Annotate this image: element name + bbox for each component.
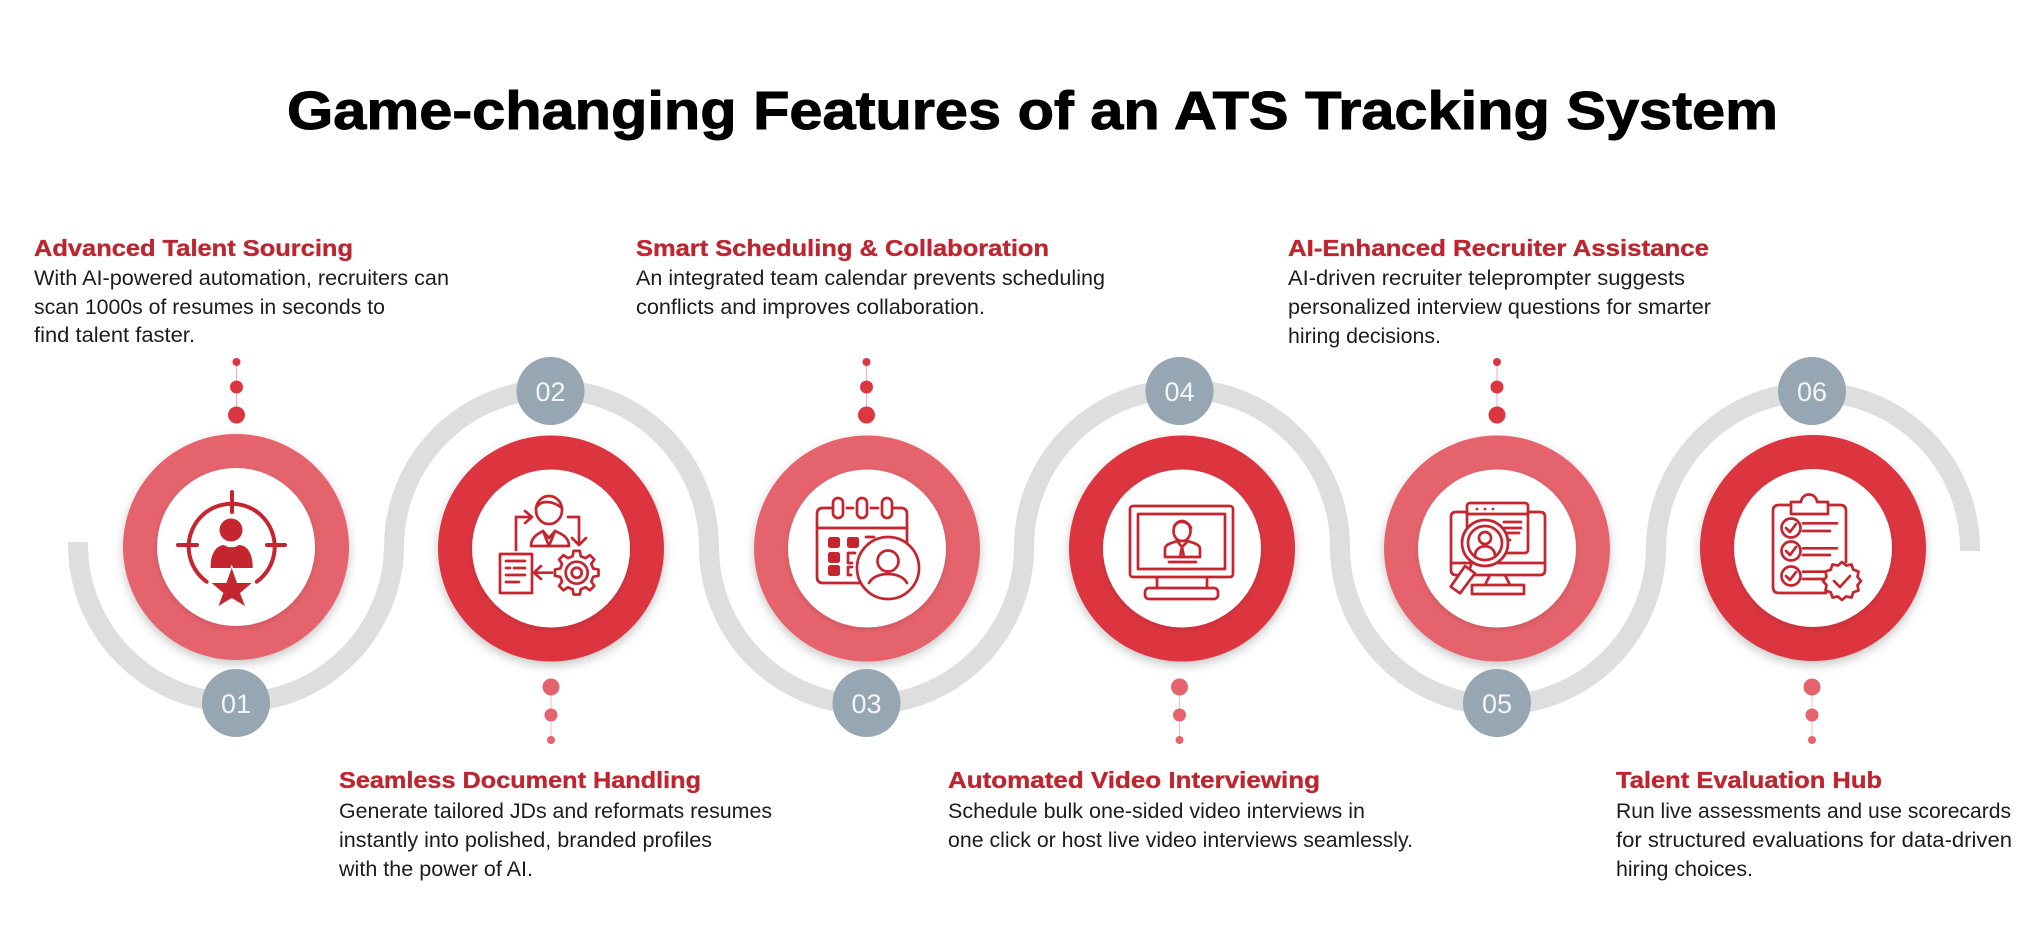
ring 5 (1384, 436, 1610, 662)
text: Advanced Talent Sourcing: Advanced Talent Sourcing (34, 235, 353, 261)
number badge 01 (202, 669, 270, 737)
text: AI-Enhanced Recruiter Assistance: AI-Enhanced Recruiter Assistance (1288, 235, 1709, 261)
number badge 03 (832, 669, 900, 737)
text: Seamless Document Handling (338, 767, 772, 881)
text: Automated Video Interviewing: Automated Video Interviewing (948, 767, 1320, 793)
number badge 04: 04 (1164, 377, 1195, 407)
text: Advanced Talent Sourcing: find talent faster. (34, 324, 195, 347)
number badge 02 (516, 357, 584, 425)
panel: step 5 (1288, 235, 1711, 737)
text: Advanced Talent Sourcing: scan 1000s of resumes in seconds to (34, 296, 385, 319)
text: AI-Enhanced Recruiter Assistance: AI-driven recruiter teleprompter suggests (1288, 267, 1685, 290)
text: Seamless Document Handling: with the power of AI. (338, 858, 533, 881)
ring 3 (754, 436, 980, 662)
ring 1 (123, 434, 349, 660)
icon: monitor with interviewee (1130, 506, 1233, 599)
number badge 05: 05 (1482, 689, 1512, 719)
text: Seamless Document Handling: Generate tailored JDs and reformats resumes (339, 800, 772, 823)
number badge 04 (1146, 357, 1214, 425)
icon: clipboard checklist with badge (1773, 494, 1861, 600)
text: AI-Enhanced Recruiter Assistance: personalized interview questions for smarter (1288, 296, 1711, 319)
connector dots bottom (542, 678, 560, 744)
text: Automated Video Interviewing (948, 767, 1413, 852)
number badge 03: 03 (851, 689, 882, 719)
text: Advanced Talent Sourcing: With AI-powered automation, recruiters can (34, 267, 449, 290)
text: Smart Scheduling & Collaboration (636, 235, 1105, 319)
number badge 06: 06 (1797, 377, 1827, 407)
panel: step 3 (636, 235, 1105, 737)
text: Talent Evaluation Hub: Run live assessments and use scorecards (1616, 800, 2011, 823)
icon: person, document and gear cycle (500, 496, 598, 594)
icon: monitor and magnifier over candidate (1451, 503, 1545, 594)
text: AI-Enhanced Recruiter Assistance: hiring decisions. (1288, 325, 1441, 348)
text: Automated Video Interviewing: one click or host live video interviews seamlessly. (948, 829, 1413, 852)
icon: calendar with person (817, 498, 919, 599)
panel: step 4 (948, 357, 1413, 852)
text: Smart Scheduling & Collaboration: An integrated team calendar prevents scheduling (636, 267, 1105, 290)
title: Game-changing Features of an ATS Tracking System (287, 81, 1778, 141)
connector dots top (1488, 358, 1506, 424)
text: AI-Enhanced Recruiter Assistance (1288, 235, 1711, 348)
text: Automated Video Interviewing: Schedule bulk one-sided video interviews in (948, 800, 1365, 823)
panel: step 1 (34, 235, 449, 737)
number badge 02: 02 (535, 377, 566, 407)
text: Advanced Talent Sourcing (34, 235, 449, 347)
ring 2 (438, 436, 664, 662)
text: Seamless Document Handling: Seamless Document Handling (339, 767, 701, 793)
text: Smart Scheduling & Collaboration: conflicts and improves collaboration. (636, 296, 985, 319)
connector dots bottom (1804, 678, 1820, 744)
text: Smart Scheduling & Collaboration: Smart Scheduling & Collaboration (636, 235, 1049, 261)
panel: step 6 (1616, 357, 2012, 881)
text: Talent Evaluation Hub: hiring choices. (1616, 858, 1753, 881)
text: Talent Evaluation Hub: Talent Evaluation Hub (1616, 767, 1882, 793)
number badge 06 (1778, 357, 1846, 425)
winding track (78, 389, 1970, 705)
text: Talent Evaluation Hub: for structured evaluations for data-driven (1616, 829, 2012, 852)
text: Seamless Document Handling: instantly into polished, branded profiles (339, 829, 712, 852)
connector dots bottom (1171, 678, 1188, 744)
panel: step 2 (338, 357, 772, 881)
text: Talent Evaluation Hub (1616, 767, 2012, 881)
ring 4 (1069, 436, 1295, 662)
connector dots top (228, 358, 245, 424)
number badge 01: 01 (221, 689, 251, 719)
number badge 05 (1463, 669, 1531, 737)
icon: target person with star (178, 492, 285, 606)
ring 6 (1700, 435, 1926, 661)
connector dots top (858, 358, 875, 424)
